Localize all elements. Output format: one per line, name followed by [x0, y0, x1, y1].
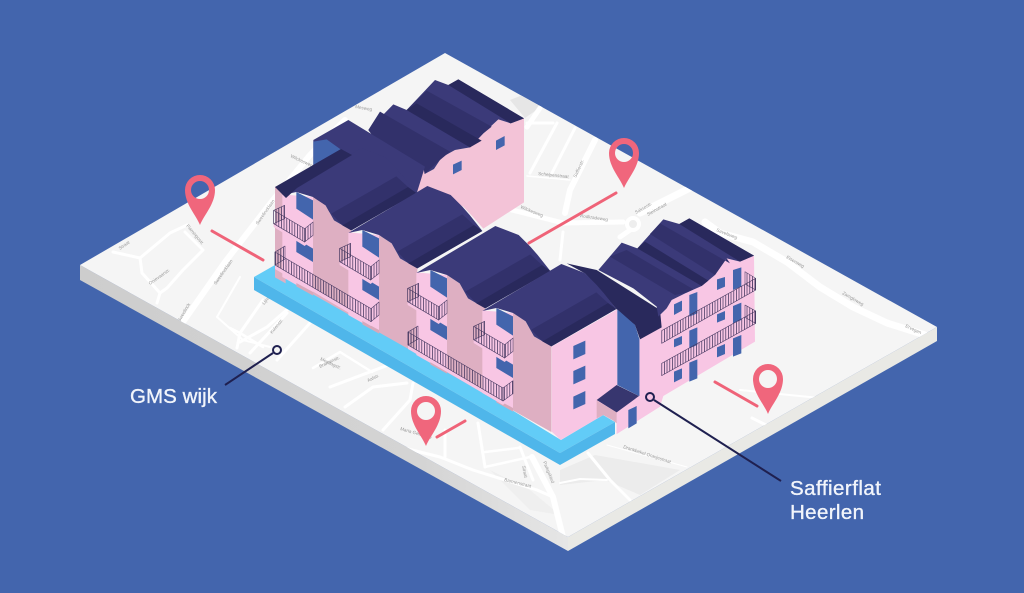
- map: GMS wijk street plan slab: Bramenstr.: [318, 355, 341, 369]
- wing section 4: [474, 264, 616, 432]
- map: GMS wijk street plan slab: Lijnstr.: [261, 292, 273, 306]
- building: Saffierflat Heerlen: [274, 79, 756, 440]
- pin: north: [609, 138, 639, 188]
- pin: west: [185, 175, 215, 225]
- map: GMS wijk street plan slab: Drankbekel Oranjestraat: [623, 444, 672, 465]
- map: GMS wijk street plan slab: Eisenweg: [786, 255, 806, 269]
- map: GMS wijk street plan slab: Schelpenstraat: [538, 171, 570, 179]
- map: GMS wijk street plan slab: Wilckesweg: [290, 153, 314, 168]
- map: GMS wijk street plan slab: Savelsweg: [716, 227, 739, 240]
- pin: south: [411, 396, 441, 446]
- map: GMS wijk street plan slab: Ervegen: [905, 323, 923, 335]
- map: GMS wijk street plan slab: Saksestr.: [634, 201, 653, 215]
- map: GMS wijk street plan slab: Steinstraat: [646, 201, 668, 217]
- map: GMS wijk street plan slab: Sweelincklaan: [213, 258, 234, 286]
- wing section 1 roof extension: [275, 120, 425, 283]
- map: GMS wijk street plan slab: Vlodkradeweg: [579, 213, 609, 222]
- front corner face and porch: [552, 309, 660, 440]
- map: GMS wijk street plan slab: Kolenstr.: [269, 318, 284, 335]
- callout: GMS wijk: GMS wijk: [130, 385, 218, 408]
- red marker lines: [212, 193, 757, 437]
- map: GMS wijk street plan slab: Sweelincklaan: [255, 198, 276, 226]
- callout: Saffierflat Heerlen: [646, 393, 881, 524]
- wing section 3: [408, 226, 550, 394]
- back block with gable: [368, 79, 524, 229]
- wing section 2: [340, 186, 482, 354]
- map: GMS wijk street plan slab: Mesweg: [355, 104, 373, 112]
- map: GMS wijk street plan slab: Sweelinck: [177, 301, 192, 322]
- right block balconies: [662, 272, 756, 376]
- map: GMS wijk street plan slab: Aalstr.: [366, 373, 380, 383]
- map: GMS wijk street plan slab: Barmenstraat: [504, 477, 532, 489]
- pin: east: [753, 364, 783, 414]
- blue plinth under the building: [254, 265, 615, 465]
- map: GMS wijk street plan slab: Maria Gewande: [400, 426, 433, 440]
- map: GMS wijk street plan slab: [80, 53, 937, 551]
- right block windows: [674, 267, 741, 382]
- right block: [567, 218, 756, 434]
- map: GMS wijk street plan slab: Straat: [118, 239, 131, 251]
- callout: GMS wijk: [130, 346, 281, 408]
- map: GMS wijk street plan slab: Wilckesweg: [520, 204, 544, 218]
- map: GMS wijk street plan slab: Mesdagstr.: [320, 356, 342, 370]
- map: GMS wijk street plan slab: Flamingostr.: [185, 223, 205, 246]
- long balcony 1: [275, 246, 379, 326]
- map: GMS wijk street plan slab: Parkgebied: [542, 461, 556, 484]
- callout: Saffierflat Heerlen: Saffierflat: [790, 477, 881, 500]
- map: GMS wijk street plan slab: Straat: [521, 465, 529, 479]
- map: GMS wijk street plan slab: Saffierstr.: [572, 159, 585, 178]
- wing section 1: [274, 148, 416, 316]
- map: GMS wijk street plan slab: Ooievaarstr.: [148, 268, 171, 286]
- callout: Saffierflat Heerlen: Heerlen: [790, 501, 864, 524]
- front roof strip of wing 1: [275, 149, 352, 198]
- long balcony 2: [408, 326, 513, 405]
- map: GMS wijk street plan slab: Zamgloweg: [842, 291, 865, 307]
